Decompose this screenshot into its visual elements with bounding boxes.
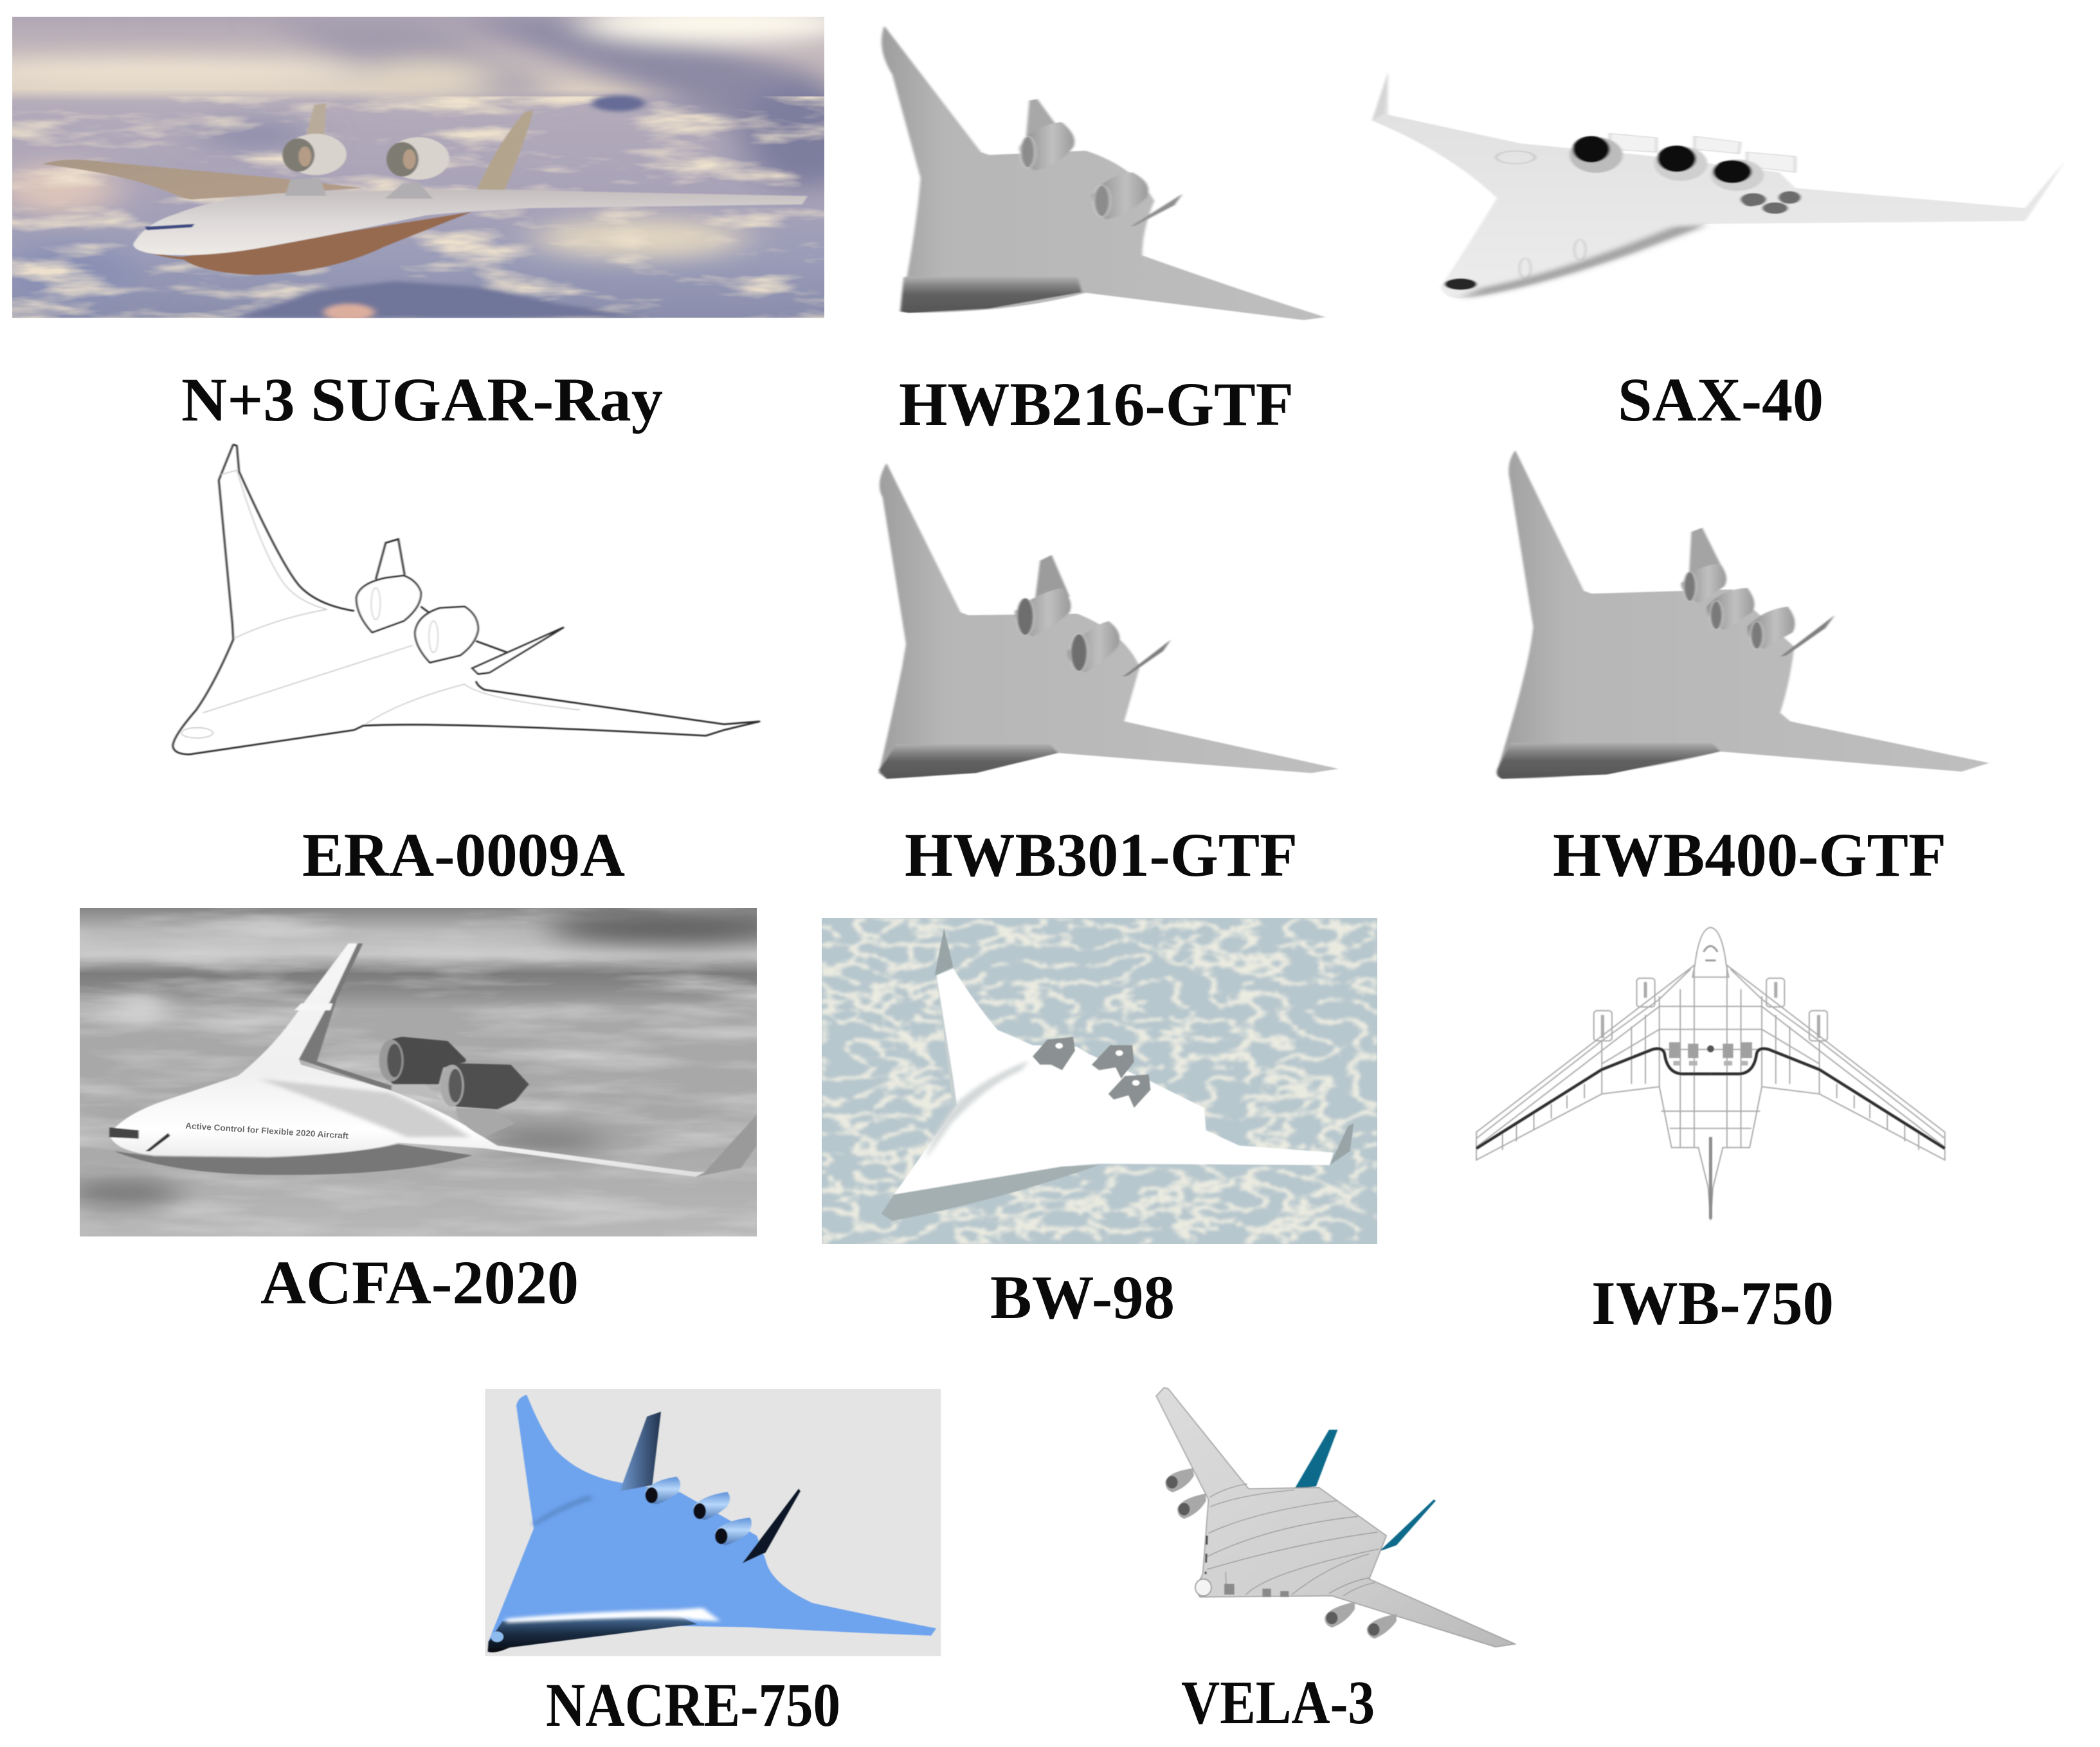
image: HWB216-GTF render [882,26,1325,320]
small fuselage lettering: Active Control for Flexible 2020 Aircraft [185,1121,349,1141]
panel: VELA-3 [1156,1388,1515,1737]
right half of wireframe [1710,927,1945,1220]
image: ERA-0009A line drawing [173,444,760,754]
image: HWB400-GTF render [1497,450,1989,779]
label: ERA-0009A: ERA-0009A [302,820,625,889]
panel: BW-98 [822,918,1377,1332]
image: SAX-40 render [1372,72,2065,298]
left half of wireframe [1476,927,1710,1220]
image: IWB-750 wireframe plan view [1476,927,1945,1220]
panel: IWB-750 [1476,927,1945,1337]
panel: SAX-40 [1372,72,2065,434]
image: ACFA-2020 over clouds [64,908,799,1236]
panel: N+3 SUGAR-Ray [0,3,869,434]
panel: HWB216-GTF [882,26,1325,439]
image: VELA-3 render [1156,1388,1515,1647]
panel: HWB400-GTF [1497,450,1989,889]
label: BW-98: BW-98 [990,1263,1175,1332]
panel: ERA-0009A [173,444,760,889]
image: NACRE-750 blue render [485,1389,941,1656]
image: BW-98 over clouds [822,918,1377,1244]
panel: ACFA-2020 [80,908,757,1304]
label: N+3 SUGAR-Ray: N+3 SUGAR-Ray [181,365,663,434]
image: HWB301-GTF render [879,463,1339,779]
label: ACFA-2020: ACFA-2020 [260,1248,579,1317]
SUGAR-Ray aircraft [42,159,363,199]
label: VELA-3: VELA-3 [1181,1668,1375,1737]
label: NACRE-750: NACRE-750 [546,1670,840,1739]
label: HWB216-GTF: HWB216-GTF [899,370,1294,439]
label: IWB-750: IWB-750 [1591,1269,1834,1337]
panel: HWB301-GTF [879,463,1339,889]
image: SUGAR-Ray over sunset clouds [12,17,824,318]
panel: NACRE-750 [485,1389,941,1739]
label: SAX-40: SAX-40 [1618,365,1824,434]
label: HWB301-GTF: HWB301-GTF [905,820,1298,889]
label: HWB400-GTF: HWB400-GTF [1553,820,1946,889]
